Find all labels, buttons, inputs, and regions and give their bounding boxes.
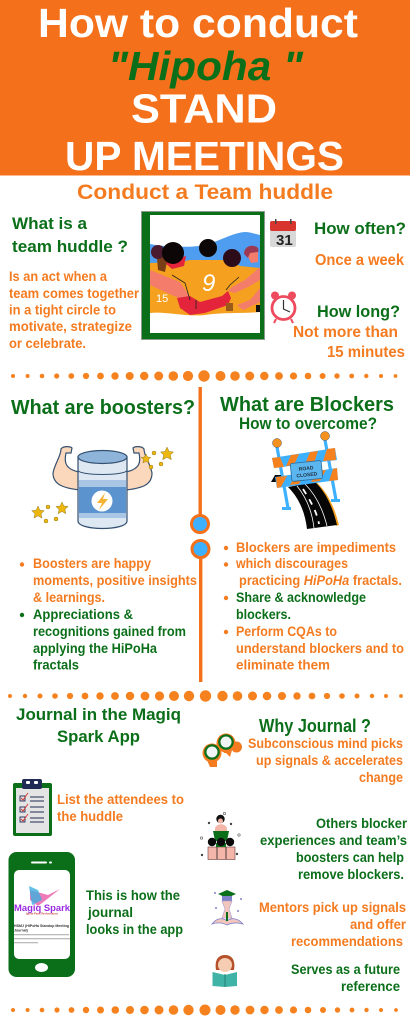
title: Hipoha: "Hipoha " — [108, 43, 304, 89]
text: This is how the journal looks: This is how the — [86, 887, 180, 903]
icon: graduate with book — [212, 890, 243, 925]
text: Others blocker experiences — [260, 815, 407, 882]
text block: huddle definition: team comes together — [9, 285, 140, 301]
icon: speaker and audience — [200, 812, 240, 860]
heading: Journal in the Magiq Spark App: Spark App — [57, 727, 140, 746]
text block: How often: How often? — [314, 219, 406, 238]
picture: team huddle — [142, 212, 264, 340]
icon: clipboard checklist — [13, 779, 52, 836]
heading: What are Blockers: What are Blockers — [220, 394, 394, 416]
icon: calendar — [270, 219, 296, 249]
section heading: Conduct a Team huddle: Conduct a Team huddle — [77, 181, 333, 204]
text block: huddle definition: in a tight circle to — [9, 302, 116, 318]
text block: How long: How long? — [317, 302, 400, 321]
list: blockers: Share & acknowledge — [236, 589, 366, 605]
text block: How long: Not more than — [293, 324, 398, 341]
text: This is how the journal looks: looks in the app — [86, 921, 183, 937]
text: Subconscious mind — [248, 735, 403, 785]
text block: How long: 15 minutes — [327, 344, 405, 361]
heading: Why Journal: Why Journal ? — [259, 716, 371, 736]
text: Subconscious mind: change — [359, 769, 403, 785]
phone mockup: Ignite Peak Performance — [26, 912, 59, 916]
list: boosters — [20, 555, 197, 672]
logo swoosh — [30, 889, 60, 906]
title: How to conduct: How to conduct — [38, 0, 358, 46]
timeline divider — [192, 387, 209, 682]
text: Others blocker experiences: remove blockers. — [298, 866, 404, 882]
text block: How often — [314, 219, 406, 269]
picture: team huddle: 9 — [202, 270, 215, 297]
header banner — [0, 0, 410, 179]
text: Mentors pick up signals: and offer — [350, 916, 407, 932]
icon: alarm clock — [271, 292, 296, 323]
heading: What are boosters: What are boosters? — [11, 397, 195, 419]
text block: How often: Once a week — [315, 252, 404, 269]
list: boosters: & learnings. — [33, 589, 105, 605]
list: boosters: fractals — [33, 656, 79, 672]
text block: huddle definition: or celebrate. — [9, 335, 86, 351]
title: UP MEETINGS: UP MEETINGS — [65, 133, 344, 179]
text block: huddle definition: motivate, strategize — [9, 318, 132, 334]
text: This is how the journal looks: journal — [87, 904, 133, 920]
icon: road closed barrier: CLOSED — [296, 471, 318, 480]
list: boosters: Appreciations & — [33, 606, 133, 622]
logo text: Magiq Spark — [14, 903, 71, 914]
text block: huddle definition: Is an act when a — [9, 268, 107, 284]
icon: person reading — [212, 955, 237, 987]
text: Mentors pick up signals — [259, 899, 407, 949]
text: Serves as a future reference — [291, 961, 400, 994]
text block: What is a team huddle — [12, 214, 128, 256]
icon: booster jar with muscles — [32, 447, 174, 528]
heading: Journal in the Magiq Spark App: Journal in the Magiq — [16, 705, 181, 724]
icon: brains — [202, 734, 242, 767]
text: Mentors pick up signals: recommendations — [291, 933, 403, 949]
text block: huddle definition — [9, 268, 140, 351]
text: Serves as a future reference: reference — [341, 978, 400, 994]
phone mockup: Journal) — [14, 928, 28, 932]
list: blockers — [224, 539, 404, 672]
text: List the attendees: the huddle — [57, 808, 123, 824]
text: Serves as a future reference: Serves as a future — [291, 961, 400, 977]
list: blockers: blockers. — [236, 606, 291, 622]
phone mockup — [8, 852, 75, 977]
text block: What is a team huddle: team huddle ? — [12, 237, 128, 256]
text block: What is a team huddle: What is a — [12, 214, 88, 233]
text block: How long — [293, 302, 405, 361]
list: blockers: Perform CQAs to — [236, 623, 337, 639]
list: blockers: eliminate them — [236, 656, 330, 672]
list: blockers: which discourages — [235, 555, 348, 571]
list: boosters: moments, positive insights — [33, 572, 197, 588]
text: List the attendees — [57, 791, 184, 824]
list: boosters: Boosters are happy — [33, 555, 151, 571]
list: boosters: recognitions gained from — [33, 623, 186, 639]
heading: Journal in the Magiq Spark App — [16, 705, 181, 746]
icon: calendar: 31 — [276, 232, 293, 249]
heading: What are Blockers: How to overcome? — [239, 414, 377, 433]
list: boosters: applying the HiPoHa — [33, 640, 157, 656]
list: blockers: practicing HiPoHa fractals. — [239, 572, 402, 588]
text: This is how the journal looks — [86, 887, 183, 937]
icon: road closed barrier — [271, 432, 340, 529]
list: blockers: Blockers are impediments — [236, 539, 396, 555]
picture: team huddle: 15 — [156, 293, 168, 305]
text: List the attendees: List the attendees to — [57, 791, 184, 807]
heading: What are Blockers — [220, 394, 394, 433]
icon: road closed barrier: ROAD — [299, 465, 314, 473]
app journal text: HSMJ (HiPoHa Standup Meeting — [14, 924, 69, 928]
title: STAND: STAND — [131, 86, 277, 132]
